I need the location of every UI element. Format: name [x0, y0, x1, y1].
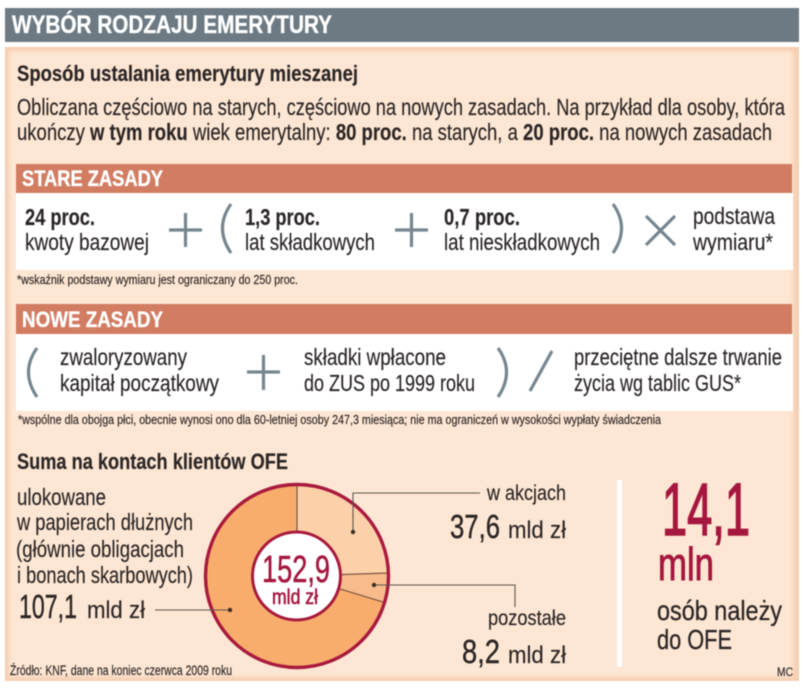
text block: intro paragraph: ukończy w tym roku wiek emerytalny: 80 proc. na starych, a 20 proc. na nowych zasadach	[17, 119, 772, 145]
old rules formula: 1,3 proc.	[245, 204, 320, 230]
callout: OFE members: osób należy	[657, 595, 782, 626]
label: debt securities: 107,1	[19, 588, 77, 625]
text block: intro paragraph	[17, 94, 785, 145]
old rules formula: podstawa	[693, 203, 775, 229]
leader line: debt securities	[155, 608, 232, 612]
title bar: WYBÓR RODZAJU EMERYTURY	[12, 9, 332, 39]
leader line: other	[372, 583, 515, 607]
panel: new rules	[16, 304, 793, 427]
segment: shares	[297, 485, 388, 576]
callout: OFE members	[657, 468, 782, 655]
old rules formula: wymiaru*	[692, 229, 773, 255]
label: debt securities: mld zł	[87, 597, 146, 624]
centre total: 152,9	[262, 549, 330, 591]
new rules header: NOWE ZASADY	[22, 307, 163, 332]
old rules formula: lat nieskładkowych	[444, 229, 600, 255]
old rules header	[16, 164, 792, 193]
segment: other	[297, 573, 388, 602]
new rules formula: składki wpłacone	[304, 344, 446, 370]
label: debt securities: i bonach skarbowych)	[17, 562, 193, 588]
donut chart	[205, 484, 388, 668]
panel: old rules	[16, 164, 793, 287]
heading: OFE accounts: Suma na kontach klientów OFE	[17, 449, 288, 474]
new rules formula: kapitał początkowy	[60, 370, 219, 396]
heading: method of calculation: Sposób ustalania emerytury mieszanej	[17, 61, 358, 86]
label: debt securities	[16, 484, 193, 625]
centre total	[252, 532, 340, 620]
title bar	[5, 8, 799, 42]
label: other: 8,2	[462, 633, 500, 670]
label: shares: mld zł	[508, 517, 567, 544]
new rules formula: do ZUS po 1999 roku	[304, 370, 475, 396]
callout: OFE members: do OFE	[657, 624, 732, 655]
old rules formula: 24 proc.	[25, 204, 95, 230]
old rules header: STARE ZASADY	[22, 166, 163, 191]
new rules formula: zwaloryzowany	[60, 344, 187, 370]
label: debt securities: ulokowane	[17, 484, 106, 510]
author initials: MC	[777, 667, 793, 679]
old rules formula: 0,7 proc.	[444, 204, 520, 230]
label: other: mld zł	[508, 642, 567, 669]
callout: OFE members: mln	[658, 538, 714, 590]
label: shares	[450, 482, 567, 545]
old rules footnote: *wskaźnik podstawy wymiaru jest ograniczany do 250 proc.	[17, 272, 298, 287]
segment: debt securities	[205, 485, 383, 667]
callout: OFE members: 14,1	[662, 468, 750, 551]
new rules header	[16, 304, 792, 334]
label: other: pozostałe	[488, 607, 566, 630]
label: debt securities: w papierach dłużnych	[16, 509, 193, 535]
leader line: shares	[351, 493, 480, 534]
label: shares: w akcjach	[486, 482, 566, 505]
label: shares: 37,6	[450, 508, 500, 545]
label: other	[462, 607, 567, 670]
old rules formula	[16, 193, 793, 270]
new rules formula	[16, 334, 793, 411]
label: debt securities: (głównie obligacjach	[16, 536, 184, 562]
centre total: mld zł	[272, 586, 318, 609]
old rules formula: lat składkowych	[245, 229, 375, 255]
old rules formula: kwoty bazowej	[25, 229, 149, 255]
new rules formula: życia wg tablic GUS*	[574, 370, 741, 396]
new rules footnote: *wspólne dla obojga płci, obecnie wynosi ono dla 60-letniej osoby 247,3 miesiąca; nie ma ograniczeń w wysokości wypłaty świadczenia	[18, 412, 662, 427]
source note: Źródło: KNF, dane na koniec czerwca 2009 roku	[10, 663, 232, 678]
